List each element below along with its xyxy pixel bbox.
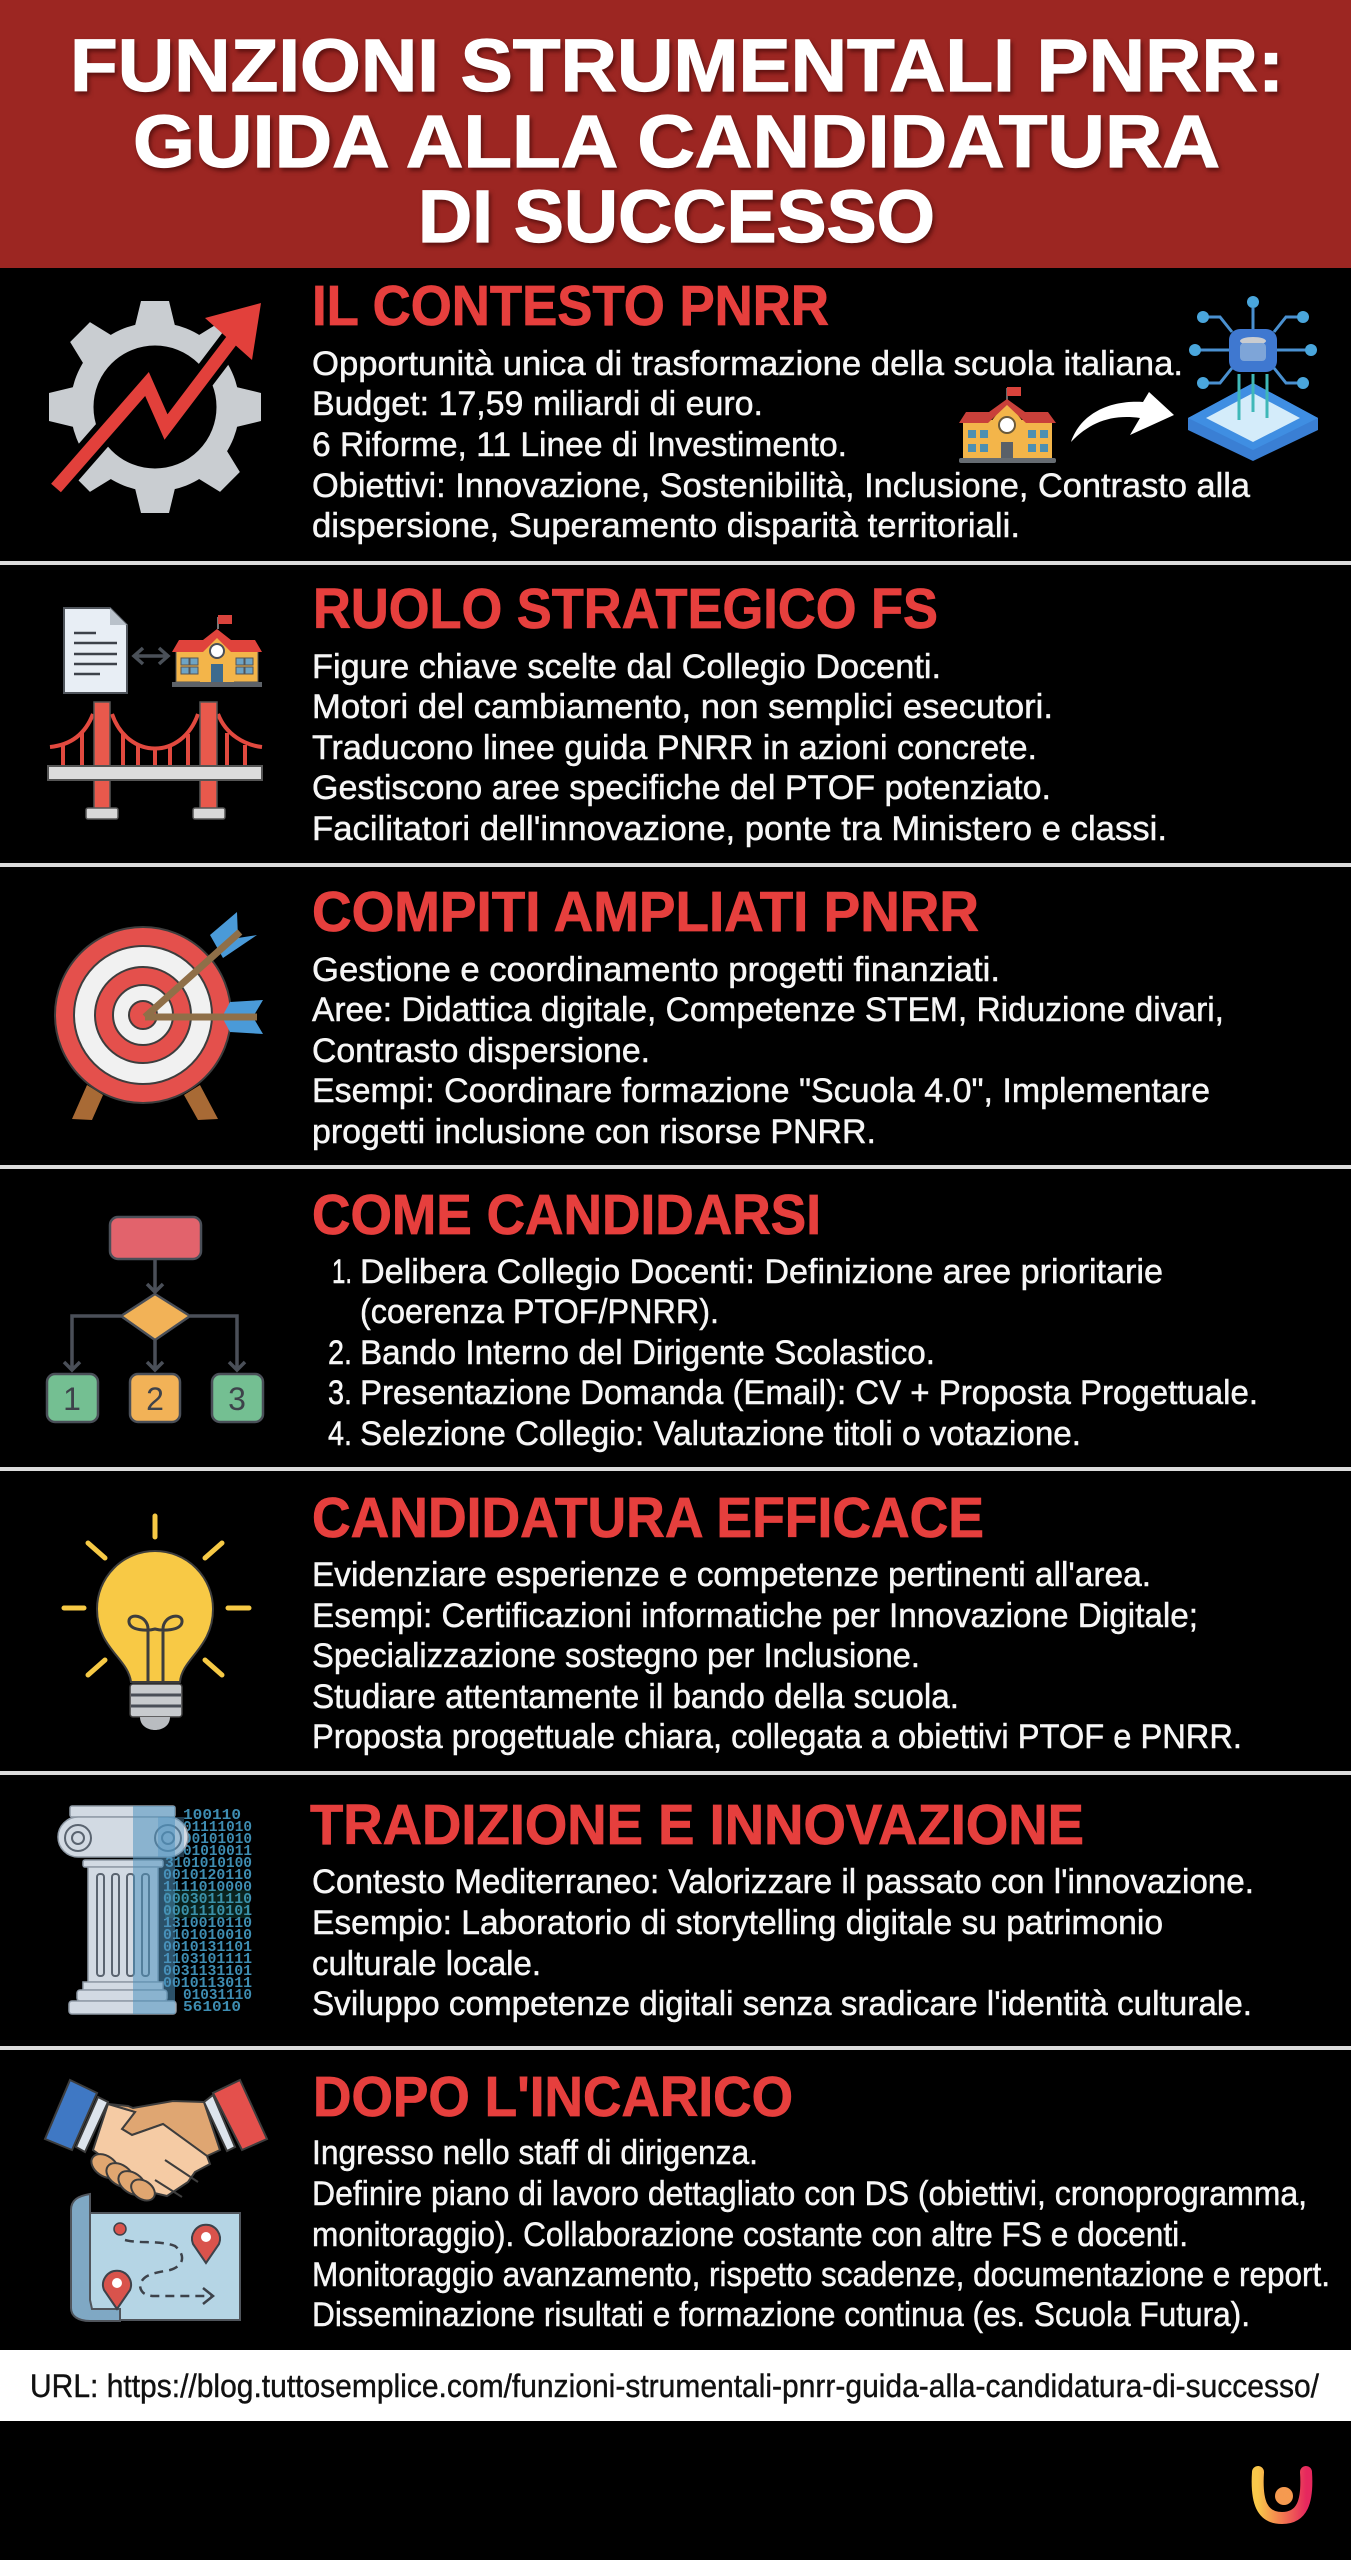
heading: DOPO L'INCARICO — [313, 2065, 793, 2129]
panel: tradizione e innovazione — [0, 1775, 1351, 2046]
text block: progetti inclusione con risorse PNRR. — [312, 1113, 876, 1151]
icon: column with binary code: 100110 — [183, 1808, 241, 1824]
text block: Disseminazione risultati e formazione continua (es. Scuola Futura). — [312, 2296, 1250, 2334]
text block — [312, 1863, 1254, 2023]
icon: column with binary code: 0101010010 — [163, 1928, 252, 1944]
text block: Proposta progettuale chiara, collegata a obiettivi PTOF e PNRR. — [312, 1718, 1242, 1756]
icon: column with binary code: 0003011110 — [163, 1892, 252, 1908]
divider — [0, 863, 1351, 867]
divider — [0, 2046, 1351, 2050]
URL bar — [0, 2350, 1351, 2421]
text block: Figure chiave scelte dal Collegio Docenti. — [312, 648, 941, 686]
numbered steps: (coerenza PTOF/PNRR). — [360, 1293, 719, 1331]
text block: Sviluppo competenze digitali senza sradicare l'identità culturale. — [312, 1985, 1252, 2023]
icon: logo — [1258, 2472, 1306, 2518]
text block: Budget: 17,59 miliardi di euro. — [312, 385, 763, 423]
icon: column with binary code: 01111010 — [183, 1820, 252, 1836]
icon: flowchart — [47, 1217, 263, 1422]
text block: Facilitatori dell'innovazione, ponte tra Ministero e classi. — [312, 810, 1167, 848]
text block: monitoraggio). Collaborazione costante con altre FS e docenti. — [312, 2216, 1188, 2254]
text block: dispersione, Superamento disparità territoriali. — [312, 507, 1020, 545]
text block — [312, 345, 1250, 545]
numbered steps: 2. — [328, 1334, 352, 1372]
heading: TRADIZIONE E INNOVAZIONE — [310, 1793, 1084, 1857]
panel: compiti ampliati PNRR — [0, 867, 1351, 1166]
numbered steps — [328, 1253, 1258, 1453]
icon: column with binary code: 0010131101 — [163, 1940, 252, 1956]
heading: IL CONTESTO PNRR — [312, 274, 829, 338]
heading: CANDIDATURA EFFICACE — [312, 1486, 984, 1550]
text block: 6 Riforme, 11 Linee di Investimento. — [312, 426, 847, 464]
icon: column with binary code — [58, 1806, 252, 2016]
text block — [312, 1556, 1242, 1756]
text block: Studiare attentamente il bando della scuola. — [312, 1678, 959, 1716]
text block: Esempi: Coordinare formazione "Scuola 4.0", Implementare — [312, 1072, 1210, 1110]
icon: digital network platform — [1188, 296, 1318, 461]
numbered steps: 3. — [328, 1374, 352, 1412]
text block: Esempio: Laboratorio di storytelling digitale su patrimonio — [312, 1904, 1163, 1942]
icon: column with binary code: 0001110101 — [163, 1904, 252, 1920]
panel: dopo l'incarico — [0, 2050, 1351, 2350]
icon: column with binary code: 561010 — [183, 2000, 241, 2016]
heading: COMPITI AMPLIATI PNRR — [312, 880, 979, 944]
divider — [0, 1771, 1351, 1775]
panel: ruolo strategico FS — [0, 565, 1351, 864]
icon: column with binary code: 1103101111 — [163, 1952, 252, 1968]
text block: Contesto Mediterraneo: Valorizzare il passato con l'innovazione. — [312, 1863, 1254, 1901]
icon: school — [959, 387, 1056, 463]
text block — [312, 2134, 1330, 2334]
icon: flowchart: 1 — [63, 1381, 81, 1417]
icon: column with binary code: 01010011 — [183, 1844, 252, 1860]
panel: il contesto PNRR — [0, 268, 1351, 562]
text block: Evidenziare esperienze e competenze pertinenti all'area. — [312, 1556, 1151, 1594]
text block: Gestiscono aree specifiche del PTOF potenziato. — [312, 769, 1051, 807]
icon: column with binary code: 0010120110 — [163, 1868, 252, 1884]
text block — [312, 951, 1224, 1151]
icon: handshake and map — [45, 2080, 267, 2321]
icon: column with binary code: 0010113011 — [163, 1976, 252, 1992]
divider — [0, 561, 1351, 565]
text block: Definire piano di lavoro dettagliato con DS (obiettivi, cronoprogramma, — [312, 2175, 1307, 2213]
text block: Gestione e coordinamento progetti finanziati. — [312, 951, 1000, 989]
text block: Specializzazione sostegno per Inclusione. — [312, 1637, 920, 1675]
icon: column with binary code: 3101010100 — [165, 1856, 252, 1872]
heading: RUOLO STRATEGICO FS — [313, 577, 938, 641]
text block: Traducono linee guida PNRR in azioni concrete. — [312, 729, 1037, 767]
icon: column with binary code: 00101010 — [183, 1832, 252, 1848]
header banner with title — [0, 0, 1351, 268]
icon: column with binary code: 1111010000 — [163, 1880, 252, 1896]
title: DI SUCCESSO — [418, 175, 935, 258]
icon: flowchart: 3 — [228, 1381, 246, 1417]
panel: come candidarsi — [0, 1169, 1351, 1468]
icon: flowchart: 2 — [146, 1381, 164, 1417]
divider — [0, 1467, 1351, 1471]
heading: COME CANDIDARSI — [312, 1183, 821, 1247]
divider — [0, 1165, 1351, 1169]
numbered steps: Bando Interno del Dirigente Scolastico. — [360, 1334, 935, 1372]
icon: target with arrows — [55, 912, 263, 1120]
title: FUNZIONI STRUMENTALI PNRR: — [70, 24, 1284, 107]
numbered steps: Selezione Collegio: Valutazione titoli o votazione. — [360, 1415, 1081, 1453]
text block: Obiettivi: Innovazione, Sostenibilità, Inclusione, Contrasto alla — [312, 467, 1250, 505]
text block: Aree: Didattica digitale, Competenze STEM, Riduzione divari, — [312, 991, 1224, 1029]
icon: column with binary code: 01031110 — [183, 1988, 252, 2004]
icon: gear with rising arrow — [49, 301, 261, 513]
title: GUIDA ALLA CANDIDATURA — [133, 100, 1220, 183]
numbered steps: Presentazione Domanda (Email): CV + Proposta Progettuale. — [360, 1374, 1258, 1412]
icon: document, school and bridge — [48, 608, 262, 819]
numbered steps: 4. — [328, 1415, 352, 1453]
text block: Motori del cambiamento, non semplici esecutori. — [312, 688, 1053, 726]
icon: column with binary code: 0031131101 — [163, 1964, 252, 1980]
icon: column with binary code: 1310010110 — [163, 1916, 252, 1932]
text block: Opportunità unica di trasformazione della scuola italiana. — [312, 345, 1183, 383]
text block: Ingresso nello staff di dirigenza. — [312, 2134, 758, 2172]
text block: culturale locale. — [312, 1945, 541, 1983]
title — [70, 24, 1284, 258]
text block: Esempi: Certificazioni informatiche per Innovazione Digitale; — [312, 1597, 1198, 1635]
text block — [312, 648, 1167, 848]
numbered steps: Delibera Collegio Docenti: Definizione aree prioritarie — [360, 1253, 1163, 1291]
panel: candidatura efficace — [0, 1471, 1351, 1771]
arrow: school to digital — [1071, 392, 1174, 442]
numbered steps: 1. — [332, 1253, 352, 1291]
text block: Contrasto dispersione. — [312, 1032, 650, 1070]
icon: light bulb — [64, 1516, 249, 1730]
